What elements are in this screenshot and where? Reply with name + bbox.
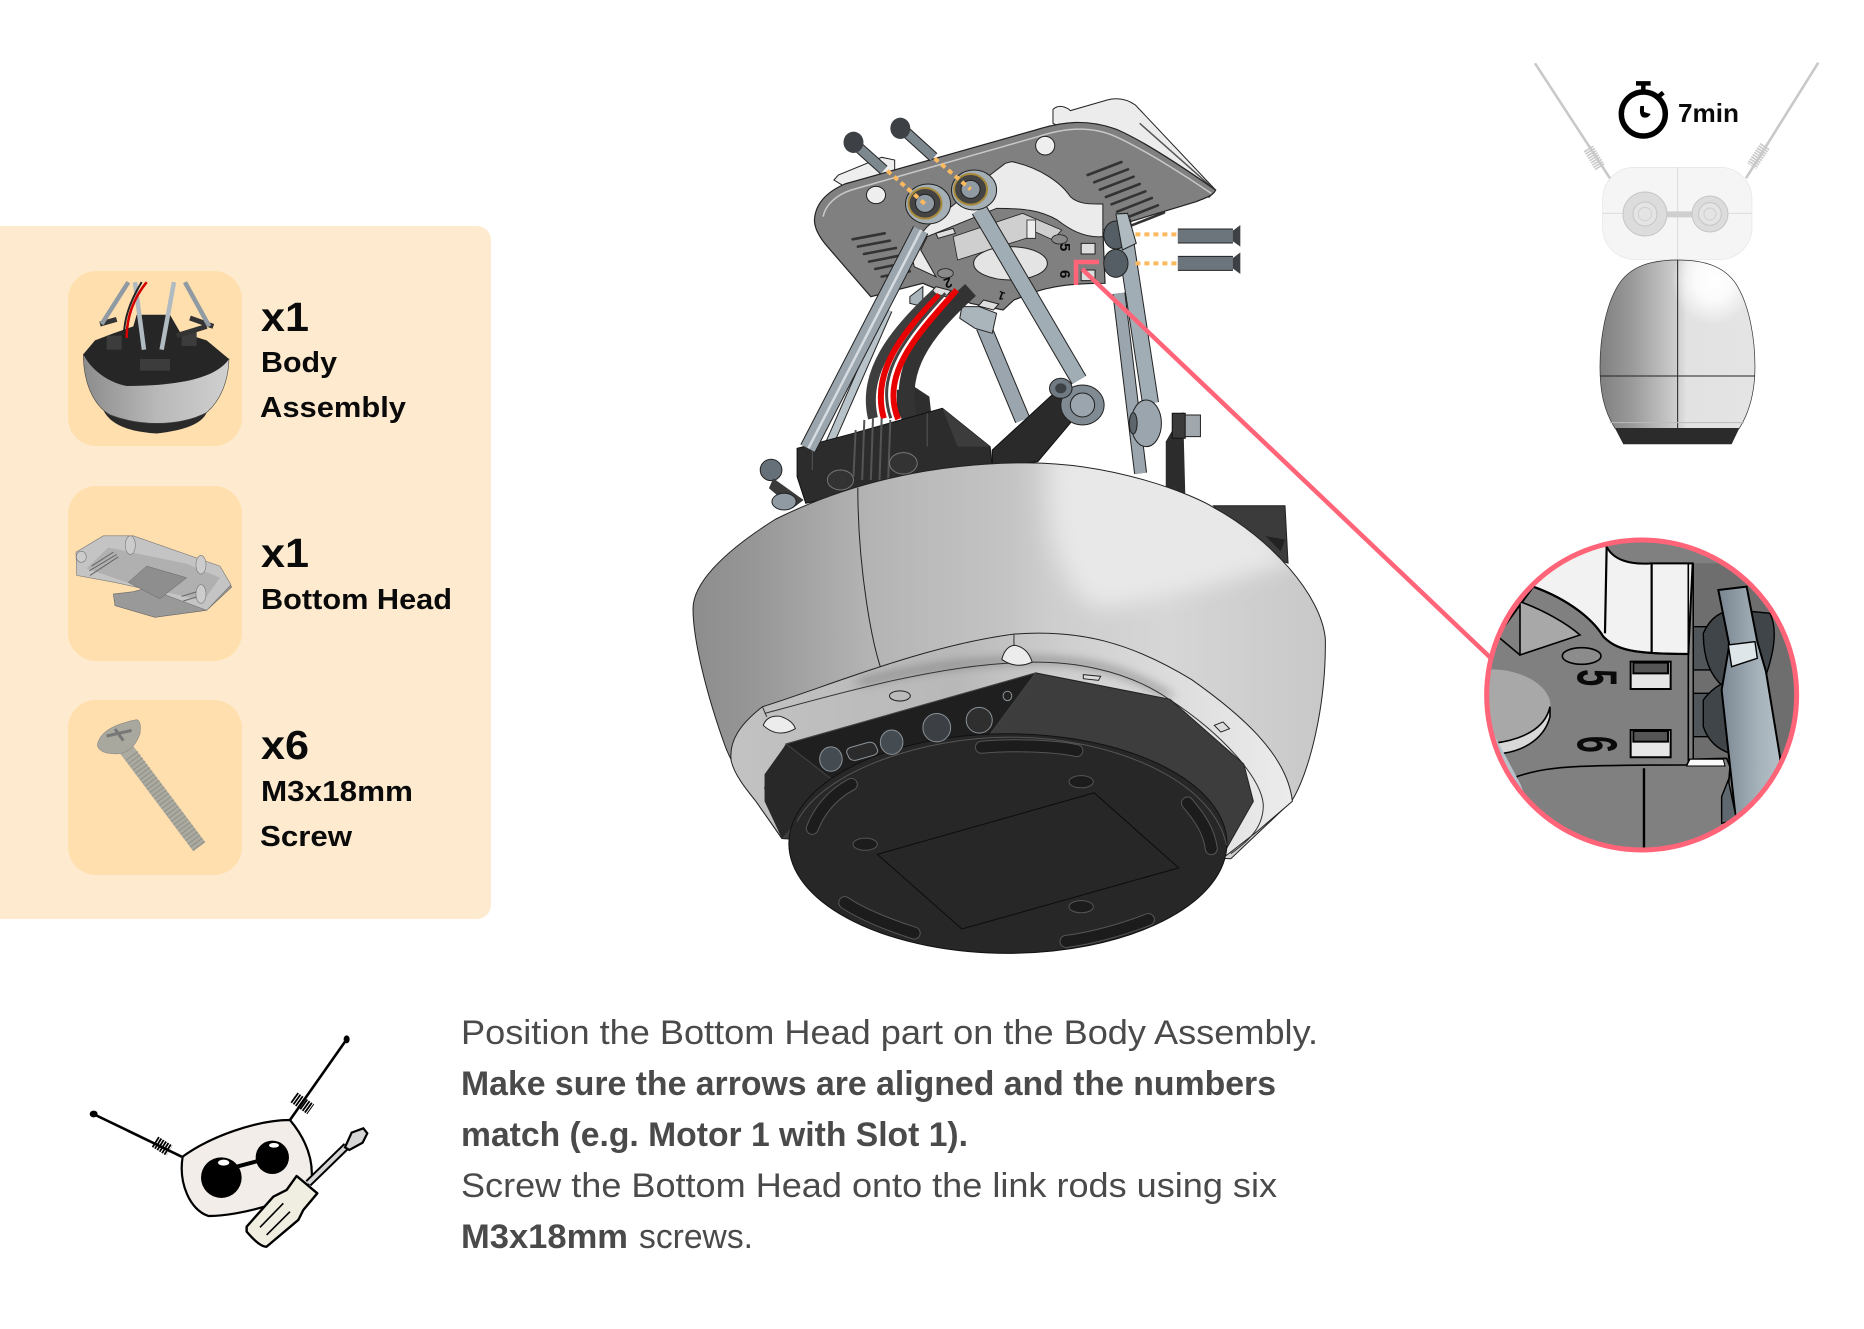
slot numbers: 6 xyxy=(1565,736,1629,753)
panel: parts list xyxy=(0,226,491,919)
illustration: robot head and body assembly xyxy=(693,99,1325,953)
screwdriver xyxy=(247,1128,367,1247)
label: x1 body assembly: Body xyxy=(261,347,337,379)
illustration: assembled robot reference xyxy=(1535,63,1818,444)
arrow: pink callout line and corner marker xyxy=(1076,262,1496,663)
label: x6 screw xyxy=(260,722,413,853)
callout: zoomed detail of slots 5 and 6 xyxy=(1484,538,1800,852)
instructions text: M3x18mm xyxy=(461,1218,628,1256)
label: x6 screw: Screw xyxy=(260,821,352,853)
bearings xyxy=(906,184,951,224)
antennas xyxy=(1535,63,1818,178)
screws xyxy=(858,147,884,170)
icon: robot mascot with screwdriver xyxy=(90,1035,367,1247)
dashed guides xyxy=(887,158,1178,263)
instructions text xyxy=(461,1014,1318,1256)
plate numbers: 5 xyxy=(1056,243,1073,251)
label: x1 bottom head: Bottom Head xyxy=(261,584,452,616)
connector ports xyxy=(820,691,1012,771)
instructions text: screws. xyxy=(639,1218,753,1256)
slot numbers xyxy=(1577,670,1618,752)
plate numbers xyxy=(941,243,1073,303)
dome body and base xyxy=(693,450,1325,953)
label: x1 bottom head xyxy=(261,530,452,616)
card: body assembly xyxy=(68,271,242,446)
plate numbers: 1 xyxy=(996,288,1007,303)
icon: bottom head part xyxy=(76,536,232,617)
instructions text: Position the Bottom Head part on the Body Assembly. xyxy=(461,1014,1318,1052)
vents xyxy=(853,162,1164,277)
body xyxy=(1600,260,1755,428)
card: screw xyxy=(68,700,242,875)
rods xyxy=(808,230,921,448)
label: x1 body assembly: Assembly xyxy=(260,392,406,424)
wires xyxy=(871,290,971,420)
icon: M3x18mm screw xyxy=(97,720,199,847)
label: x6 screw: M3x18mm xyxy=(261,776,413,808)
plate numbers: 6 xyxy=(1056,270,1073,278)
slot windows xyxy=(1631,662,1671,757)
rod xyxy=(1717,586,1781,814)
label: x1 body assembly xyxy=(260,294,406,424)
label: x1 bottom head: x1 xyxy=(261,530,309,576)
instructions text: match (e.g. Motor 1 with Slot 1). xyxy=(461,1116,968,1154)
icon: stopwatch xyxy=(1621,83,1665,136)
instructions text: Screw the Bottom Head onto the link rods using six xyxy=(461,1167,1277,1205)
plate numbers: 2 xyxy=(941,274,954,292)
bumps xyxy=(763,645,1229,733)
label: x6 screw: x6 xyxy=(261,722,309,768)
instructions text: Make sure the arrows are aligned and the numbers xyxy=(461,1065,1276,1103)
label: time 7min: 7min xyxy=(1678,98,1739,128)
head plate with link rods xyxy=(760,99,1240,510)
head xyxy=(1603,167,1752,259)
icon: body assembly xyxy=(83,282,229,433)
card: bottom head xyxy=(68,486,242,661)
slot numbers: 5 xyxy=(1565,669,1629,686)
motors and arms xyxy=(797,408,992,503)
label: x1 body assembly: x1 xyxy=(261,294,309,340)
